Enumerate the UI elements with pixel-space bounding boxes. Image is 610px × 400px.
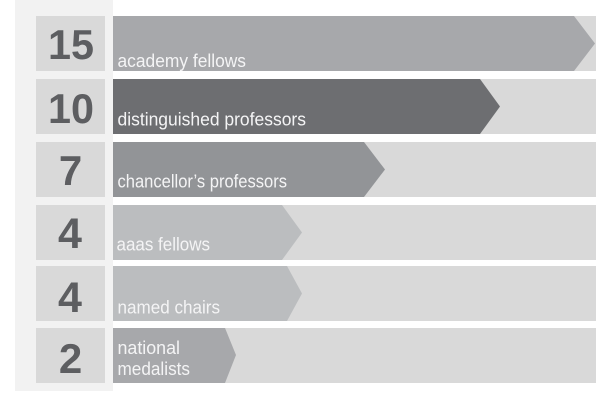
arrow bar: national medalists [113, 328, 236, 383]
bar track: distinguished professors [113, 79, 596, 134]
label: national medalists: national [118, 337, 180, 358]
row: aaas fellows [36, 205, 596, 260]
count box: 10: 10 [48, 85, 94, 132]
row: chancellor's professors [36, 142, 596, 197]
arrow bar: academy fellows [113, 16, 595, 71]
count box: 4 [36, 266, 105, 322]
arrow bar: named chairs [113, 266, 302, 321]
count box: 4: 4 [58, 274, 82, 322]
count box: 7 [36, 142, 105, 197]
row: named chairs [36, 266, 596, 322]
count box: 15 [36, 16, 105, 71]
count box: 4 [36, 205, 105, 260]
count box: 2 [36, 328, 105, 383]
label: national medalists: medalists [118, 358, 190, 379]
count box: 10 [36, 79, 105, 134]
arrow bar: distinguished professors [113, 79, 500, 134]
count box: 4: 4 [58, 210, 82, 258]
count box: 7: 7 [59, 147, 82, 194]
bar track: national medalists [113, 328, 596, 383]
label: aaas fellows: aaas fellows [116, 234, 210, 254]
arrow bar: chancellor's professors [113, 142, 385, 197]
row: national medalists [36, 328, 596, 383]
row: academy fellows [36, 16, 596, 71]
bar track: academy fellows [113, 16, 596, 71]
label: named chairs: named chairs [118, 296, 220, 318]
bar track: chancellor's professors [113, 142, 596, 197]
count box: 15: 15 [48, 21, 94, 68]
bar track: aaas fellows [113, 205, 596, 260]
count box: 2: 2 [59, 335, 82, 382]
label: academy fellows: academy fellows [118, 50, 246, 71]
bar track: named chairs [113, 266, 596, 321]
row: distinguished professors [36, 79, 596, 134]
label: distinguished professors: distinguished professors [118, 108, 306, 130]
left panel background [15, 0, 113, 391]
arrow bar: aaas fellows [113, 205, 302, 260]
label: chancellor's professors: chancellor’s professors [118, 170, 287, 192]
